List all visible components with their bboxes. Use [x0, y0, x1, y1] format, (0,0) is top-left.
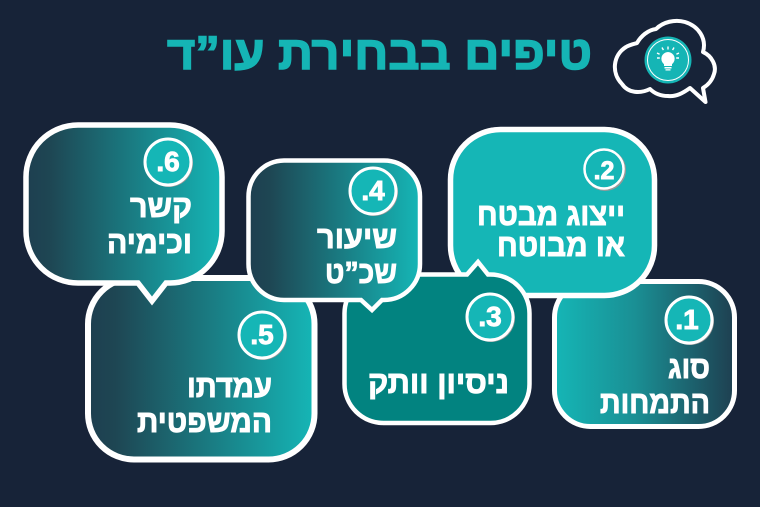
number badge 3: .3 [478, 301, 502, 332]
number badge 5 [239, 312, 287, 360]
panel: tip 4 [248, 160, 420, 310]
text: tip 1 label [600, 350, 710, 420]
text: tip 4 label: שכ”ט [325, 255, 397, 290]
number badge 2 [584, 149, 626, 191]
text: tip 6 label [107, 189, 192, 260]
text: tip 6 label: קשר [130, 189, 192, 224]
text: tip 5 label: המשפטית [137, 404, 272, 439]
number badge 4 [350, 168, 398, 216]
number badge 2: .2 [594, 157, 614, 185]
number badge 6: .6 [156, 146, 180, 177]
text: tip 6 label: וכימיה [107, 225, 192, 260]
number badge 4: .4 [361, 175, 385, 206]
number badge 1: .1 [675, 304, 699, 335]
number badge 5: .5 [250, 319, 274, 350]
text: tip 1 label: סוג [668, 350, 710, 385]
text: tip 2 label [477, 197, 625, 263]
number badge 3 [467, 294, 515, 342]
text: tip 3 label: ניסיון וותק [368, 365, 509, 400]
title: טיפים בבחירת עו”ד [167, 26, 592, 79]
text: tip 2 label: ייצוג מבטח [477, 197, 625, 232]
text: tip 4 label: שיעור [317, 220, 397, 255]
text: tip 5 label [137, 369, 272, 439]
icon: cloud with light bulb [615, 21, 715, 102]
panel: tip 1 [554, 282, 734, 426]
text: tip 1 label: התמחות [600, 385, 710, 420]
panel: tip 5 [88, 278, 314, 460]
panel: tip 6 [26, 125, 222, 301]
panel: tip 3 [344, 262, 530, 423]
text: tip 5 label: עמדתו [187, 369, 272, 404]
text: tip 4 label [317, 220, 397, 290]
text: tip 2 label: או מבוטח [497, 228, 625, 263]
number badge 1 [666, 297, 714, 345]
panel: tip 2 [450, 130, 654, 296]
number badge 6 [145, 139, 193, 187]
